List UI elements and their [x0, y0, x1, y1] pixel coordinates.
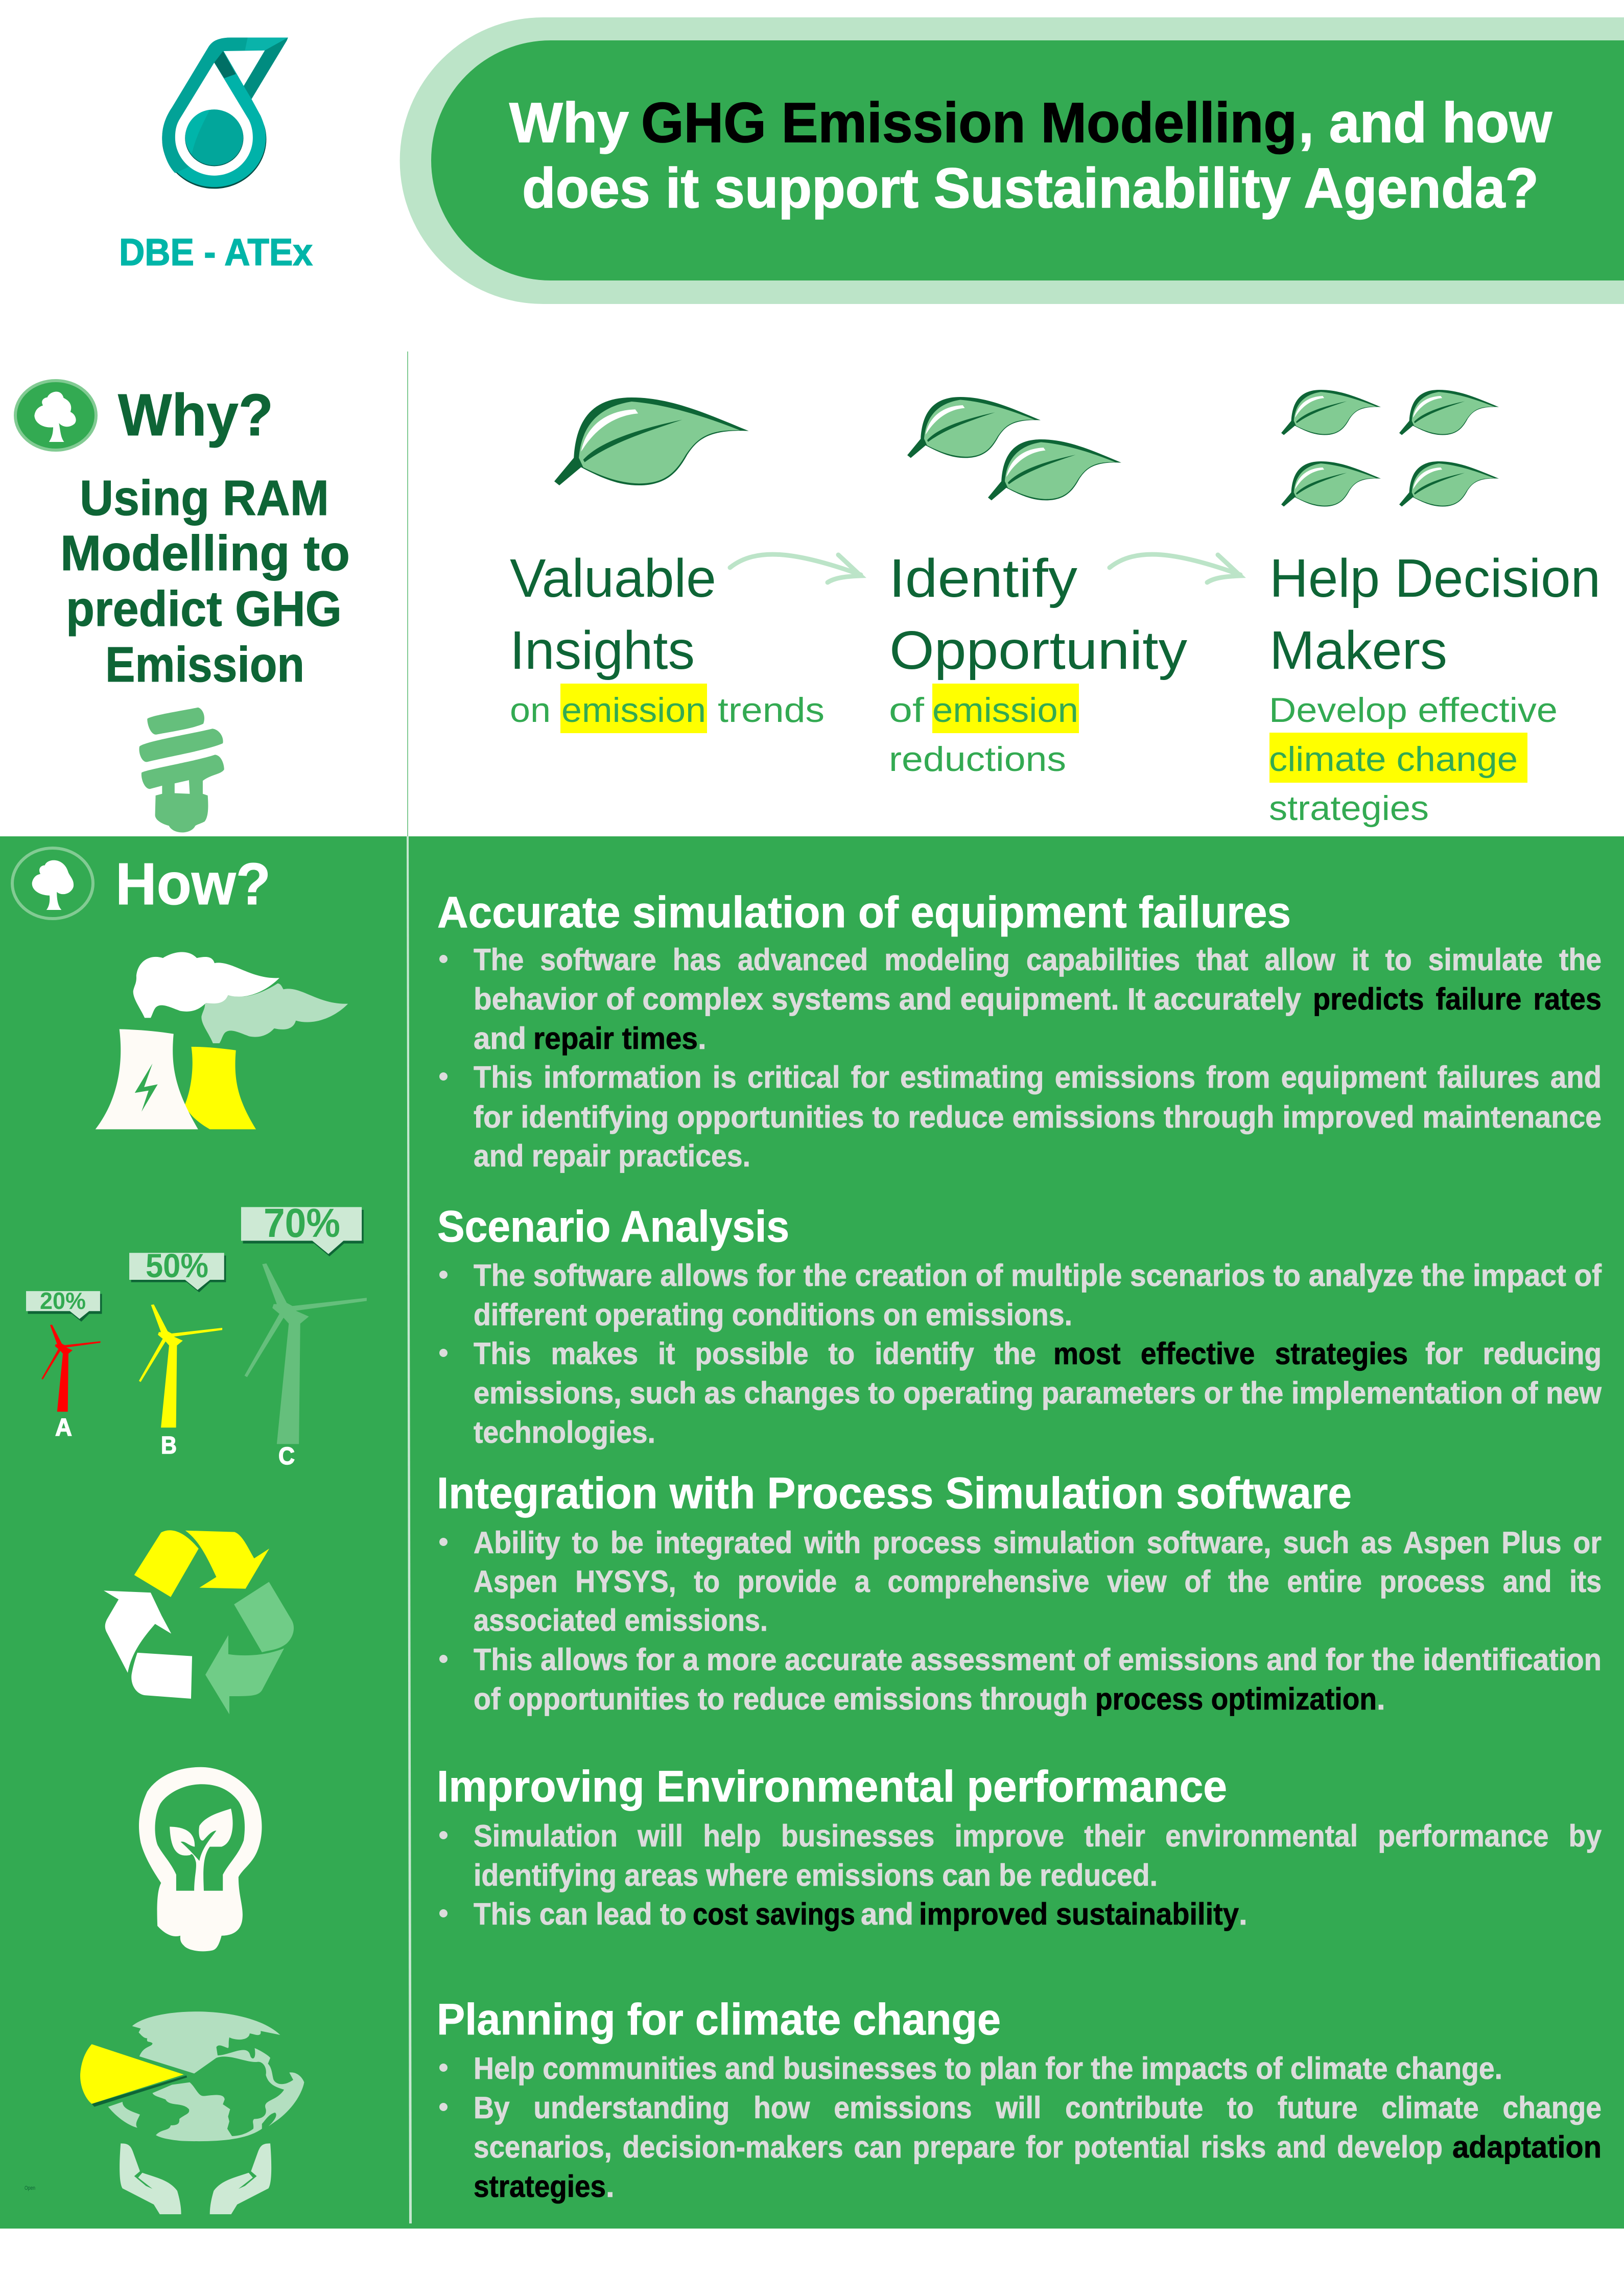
- title banner: does it support Sustainability Agenda?: [522, 157, 1539, 220]
- section: improving environmental performance: This can lead to: [474, 1897, 687, 1931]
- chart: wind turbines with percentages: A: [55, 1414, 72, 1441]
- logo caption: DBE - ATEx: [119, 231, 313, 273]
- heading: how: How?: [115, 851, 271, 917]
- section: planning for climate change: strategies: [474, 2169, 606, 2204]
- chart: wind turbines with percentages: 70%: [264, 1200, 340, 1246]
- icon: power plant cooling towers: [96, 952, 348, 1129]
- icon: tree badge why: [15, 381, 96, 450]
- subheading: using RAM modelling: Modelling to: [60, 525, 350, 581]
- chart: wind turbines with percentages: 50%: [146, 1247, 208, 1284]
- title banner: , and how: [1299, 91, 1552, 154]
- section: scenario analysis: most effective strategies: [1053, 1337, 1408, 1371]
- section: scenario analysis: This makes it possible to identify the: [474, 1337, 1036, 1371]
- section: integration with process simulation: [437, 1469, 1602, 1716]
- arrow: insights to opportunity: [730, 554, 861, 582]
- icon: tree badge how: [12, 848, 93, 919]
- section: improving environmental performance: and: [861, 1897, 913, 1931]
- tiny label: Open: [25, 2185, 35, 2191]
- section: scenario analysis: Scenario Analysis: [437, 1202, 789, 1251]
- turbine B 50%: [129, 1253, 226, 1427]
- section: scenario analysis: different operating conditions on emissions.: [474, 1298, 1072, 1332]
- icon: four leaves: [1281, 390, 1499, 507]
- text: valuable insights: trends: [718, 691, 825, 730]
- icon: globe with pie slice and hands: [80, 2011, 304, 2214]
- heading: why: Why?: [118, 382, 273, 448]
- section: accurate simulation: Accurate simulation of equipment failures: [437, 888, 1291, 937]
- text: help decision makers: climate change: [1269, 740, 1518, 779]
- section: integration with process simulation: Integration with Process Simulation software: [437, 1469, 1352, 1518]
- section: planning for climate change: adaptation: [1452, 2130, 1602, 2164]
- section: planning for climate change: [437, 1995, 1602, 2204]
- text: valuable insights: emission: [561, 691, 706, 730]
- section: improving environmental performance: improved sustainability: [919, 1897, 1239, 1931]
- chart: wind turbines with percentages: C: [278, 1443, 295, 1470]
- icon: energy saving bulb: [139, 708, 224, 832]
- section: planning for climate change: Planning for climate change: [437, 1995, 1001, 2044]
- section: scenario analysis: for reducing: [1425, 1337, 1602, 1371]
- icon: recycle arrows: [104, 1530, 294, 1714]
- subheading: using RAM modelling: predict GHG: [66, 581, 342, 637]
- icon: light bulb with sprout: [139, 1767, 262, 1951]
- section: accurate simulation: .: [698, 1021, 707, 1056]
- text: help decision makers: Makers: [1269, 620, 1447, 681]
- section: accurate simulation: for identifying opportunities to reduce emissions through improved maintenance: [474, 1100, 1602, 1134]
- section: improving environmental performance: identifying areas where emissions can be reduced.: [474, 1858, 1158, 1892]
- chart: wind turbines with percentages: 20%: [40, 1287, 86, 1314]
- turbine A 20%: [26, 1291, 102, 1412]
- panel: how background: [0, 836, 1624, 2229]
- section: accurate simulation: behavior of complex systems and equipment. It accurately: [474, 982, 1302, 1016]
- chart: wind turbines with percentages: B: [161, 1432, 177, 1459]
- section: accurate simulation: [437, 888, 1602, 1173]
- icon: single leaf: [554, 397, 749, 485]
- text: identify opportunity: emission: [932, 691, 1078, 730]
- section: integration with process simulation: process optimization: [1095, 1682, 1377, 1716]
- text: identify opportunity: reductions: [889, 740, 1066, 779]
- logo: teal droplet: [162, 37, 288, 189]
- section: planning for climate change: Help communities and businesses to plan for the impacts of climate change.: [474, 2051, 1502, 2086]
- text: identify opportunity: Opportunity: [889, 620, 1187, 681]
- section: planning for climate change: scenarios, decision-makers can prepare for potential risks and develop: [474, 2130, 1443, 2164]
- subheading: using RAM modelling: [60, 470, 350, 692]
- section: scenario analysis: [437, 1202, 1602, 1449]
- section: improving environmental performance: .: [1239, 1897, 1248, 1931]
- text: valuable insights: Insights: [510, 620, 695, 681]
- arrow: opportunity to decision makers: [1110, 554, 1240, 582]
- text: help decision makers: [1269, 548, 1601, 828]
- subheading: using RAM modelling: Emission: [105, 637, 304, 692]
- text: help decision makers: strategies: [1269, 789, 1429, 828]
- text: valuable insights: on: [510, 691, 551, 730]
- section: scenario analysis: technologies.: [474, 1415, 655, 1449]
- section: improving environmental performance: Improving Environmental performance: [437, 1762, 1227, 1811]
- title banner: [400, 17, 1624, 304]
- section: accurate simulation: predicts failure rates: [1313, 982, 1602, 1016]
- section: planning for climate change: .: [606, 2169, 615, 2204]
- subheading: using RAM modelling: Using RAM: [80, 470, 329, 526]
- text: valuable insights: Valuable: [510, 548, 716, 608]
- section: improving environmental performance: cost savings: [693, 1897, 855, 1931]
- section: accurate simulation: repair times: [533, 1021, 698, 1056]
- text: identify opportunity: Identify: [889, 548, 1077, 608]
- title banner: GHG Emission Modelling: [641, 91, 1297, 154]
- text: valuable insights: [510, 548, 825, 733]
- text: identify opportunity: of: [889, 691, 924, 730]
- section: accurate simulation: and repair practices.: [474, 1139, 750, 1173]
- section: accurate simulation: and: [474, 1021, 526, 1056]
- section: improving environmental performance: [437, 1762, 1602, 1931]
- title banner: Why: [509, 91, 629, 154]
- turbine C 70%: [241, 1207, 367, 1444]
- text: help decision makers: Develop effective: [1269, 691, 1558, 730]
- text: help decision makers: Help Decision: [1269, 548, 1601, 608]
- icon: two leaves: [907, 397, 1121, 500]
- text: identify opportunity: [889, 548, 1187, 779]
- panel: why: [15, 352, 1601, 836]
- section: integration with process simulation: of opportunities to reduce emissions through: [474, 1682, 1088, 1716]
- section: integration with process simulation: .: [1377, 1682, 1385, 1716]
- section: integration with process simulation: associated emissions.: [474, 1603, 768, 1637]
- chart: wind turbines with percentages: [26, 1200, 367, 1470]
